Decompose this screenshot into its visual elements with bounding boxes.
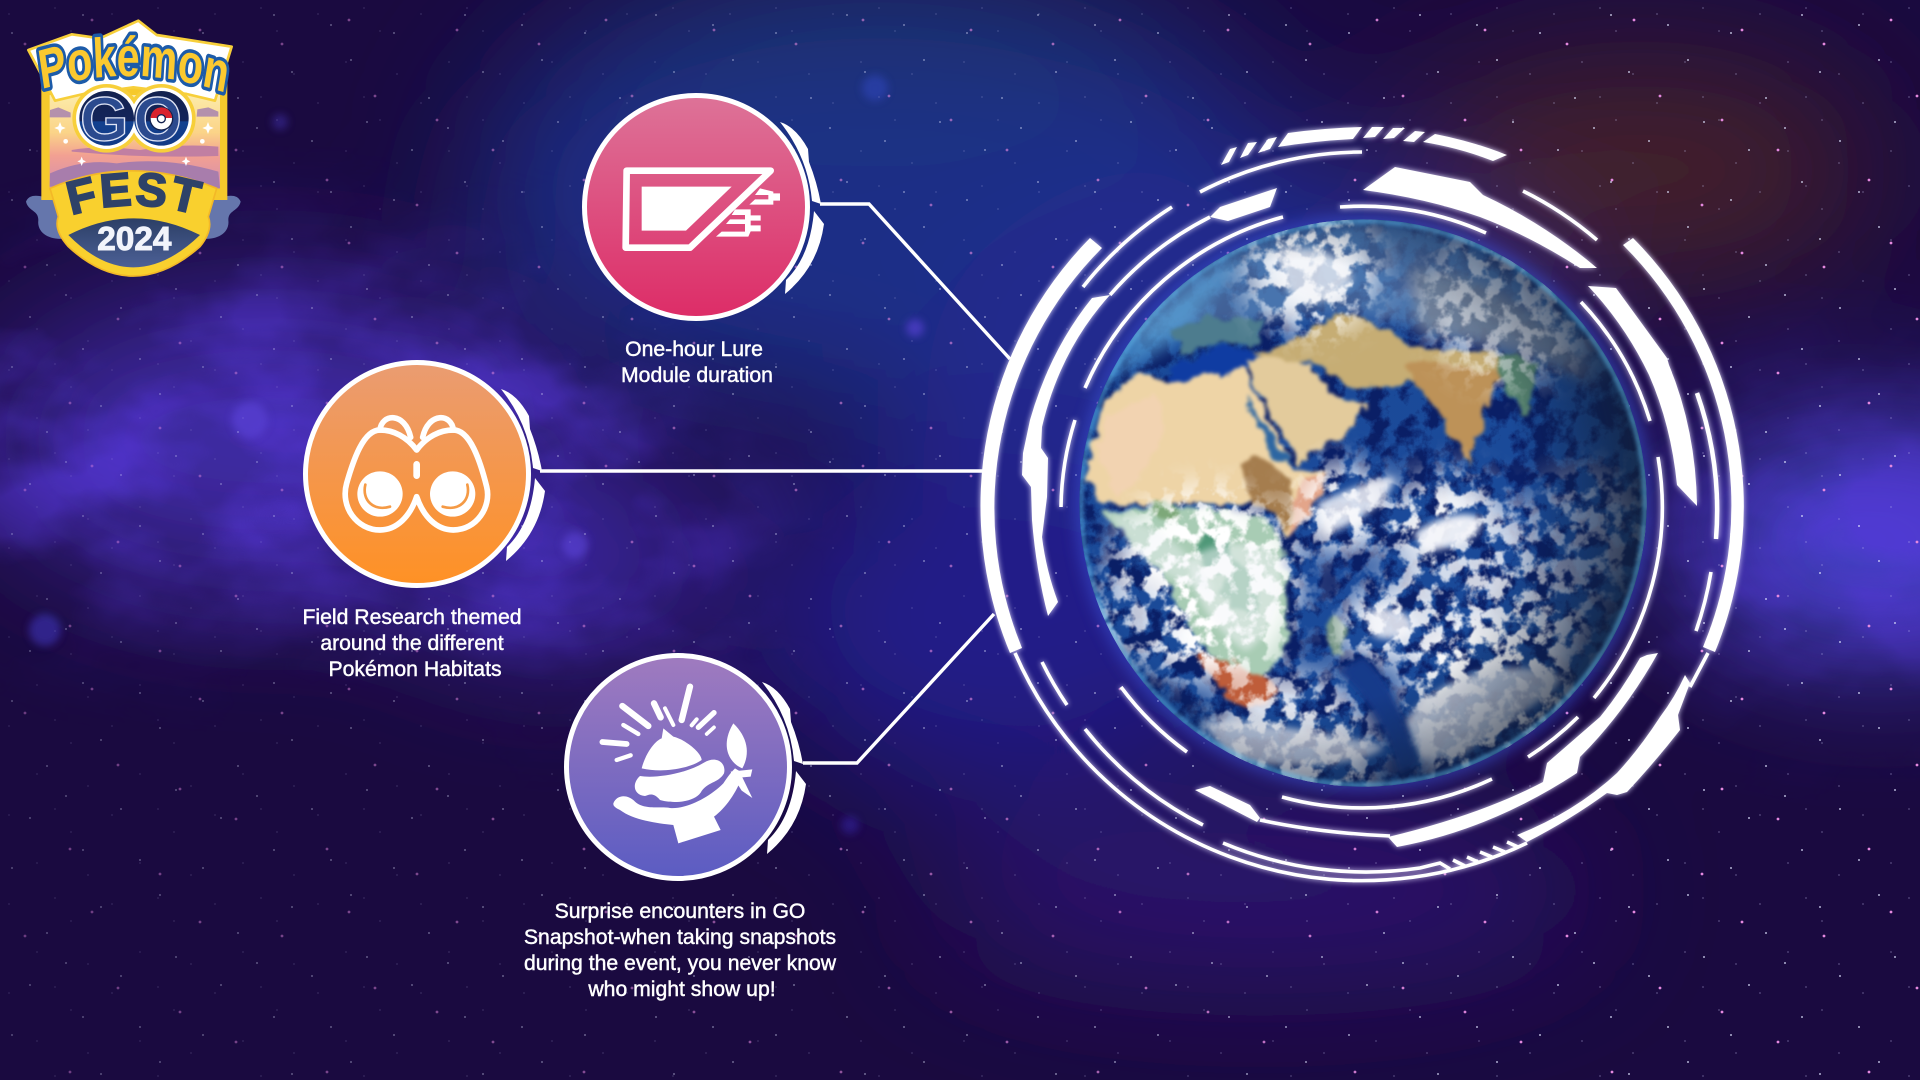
logo year bowl bbox=[68, 218, 200, 267]
research badge bracket bbox=[501, 389, 545, 561]
panel: go snapshot bbox=[524, 656, 837, 1001]
horn of Africa bbox=[1292, 471, 1328, 534]
Madagascar bbox=[1326, 617, 1347, 660]
East Africa highlands bbox=[1243, 459, 1293, 529]
logo: Pokémon GO Fest 2024 bbox=[26, 19, 241, 277]
panel: field research bbox=[302, 362, 545, 681]
logo GO emblem: GO bbox=[80, 86, 187, 155]
connector: snapshot bbox=[803, 614, 994, 763]
connector: lure bbox=[820, 204, 1010, 359]
lure caption: One-hour Lure bbox=[625, 338, 763, 361]
snapshot caption: Surprise encounters in GO bbox=[555, 900, 805, 923]
Black Sea and Mediterranean bbox=[1167, 350, 1258, 388]
logo sparkles bbox=[54, 122, 214, 166]
logo year: 2024 bbox=[97, 221, 172, 258]
icon: lure module bbox=[626, 171, 780, 248]
logo sky clouds bbox=[50, 107, 220, 188]
research caption: Pokémon Habitats bbox=[328, 658, 502, 681]
research badge circle bbox=[306, 362, 528, 586]
snapshot caption: during the event, you never know bbox=[524, 952, 837, 975]
Central Africa bbox=[1103, 508, 1287, 674]
thin ring arcs bbox=[1015, 152, 1717, 881]
snapshot caption: Snapshot-when taking snapshots bbox=[524, 926, 836, 949]
logo fest lettering: FEST bbox=[66, 172, 204, 216]
research caption: Field Research themed bbox=[302, 606, 522, 629]
logo white banner bbox=[28, 21, 232, 101]
high latitude haze bbox=[1113, 220, 1613, 376]
cloud masses bbox=[1276, 248, 1353, 301]
Central Asia bbox=[1246, 314, 1526, 390]
panel: lure module bbox=[584, 96, 824, 387]
connector lines bbox=[540, 204, 1010, 763]
Sahara desert bbox=[1090, 370, 1330, 536]
research caption: around the different bbox=[320, 632, 504, 655]
connector: research bbox=[540, 469, 983, 473]
earth surface bbox=[1077, 217, 1649, 789]
earth atmosphere glow bbox=[1074, 214, 1652, 792]
lure badge bracket bbox=[780, 122, 824, 294]
snapshot badge bracket bbox=[762, 682, 806, 854]
Red Sea bbox=[1246, 398, 1292, 465]
lure badge circle bbox=[584, 96, 808, 318]
lure caption: Module duration bbox=[621, 364, 773, 387]
snapshot badge circle bbox=[566, 656, 790, 878]
inner ring chunks bbox=[1022, 167, 1697, 822]
India bbox=[1406, 364, 1501, 465]
top segmented ticks bbox=[1221, 127, 1507, 165]
snapshot caption: who might show up! bbox=[587, 978, 776, 1001]
logo wordmark: Pokémon bbox=[36, 32, 230, 96]
logo shield bbox=[41, 77, 227, 200]
hud rings around the globe bbox=[980, 127, 1744, 881]
icon: binoculars bbox=[345, 418, 488, 530]
earth globe bbox=[1074, 214, 1652, 792]
South Africa bbox=[1197, 656, 1279, 708]
Arabia bbox=[1248, 356, 1368, 463]
logo ribbons bbox=[26, 196, 241, 239]
outer ring bands bbox=[980, 238, 1744, 847]
Europe bbox=[1174, 319, 1266, 355]
icon: surprised trainer with flash bbox=[602, 687, 752, 843]
logo crest bbox=[50, 171, 217, 276]
